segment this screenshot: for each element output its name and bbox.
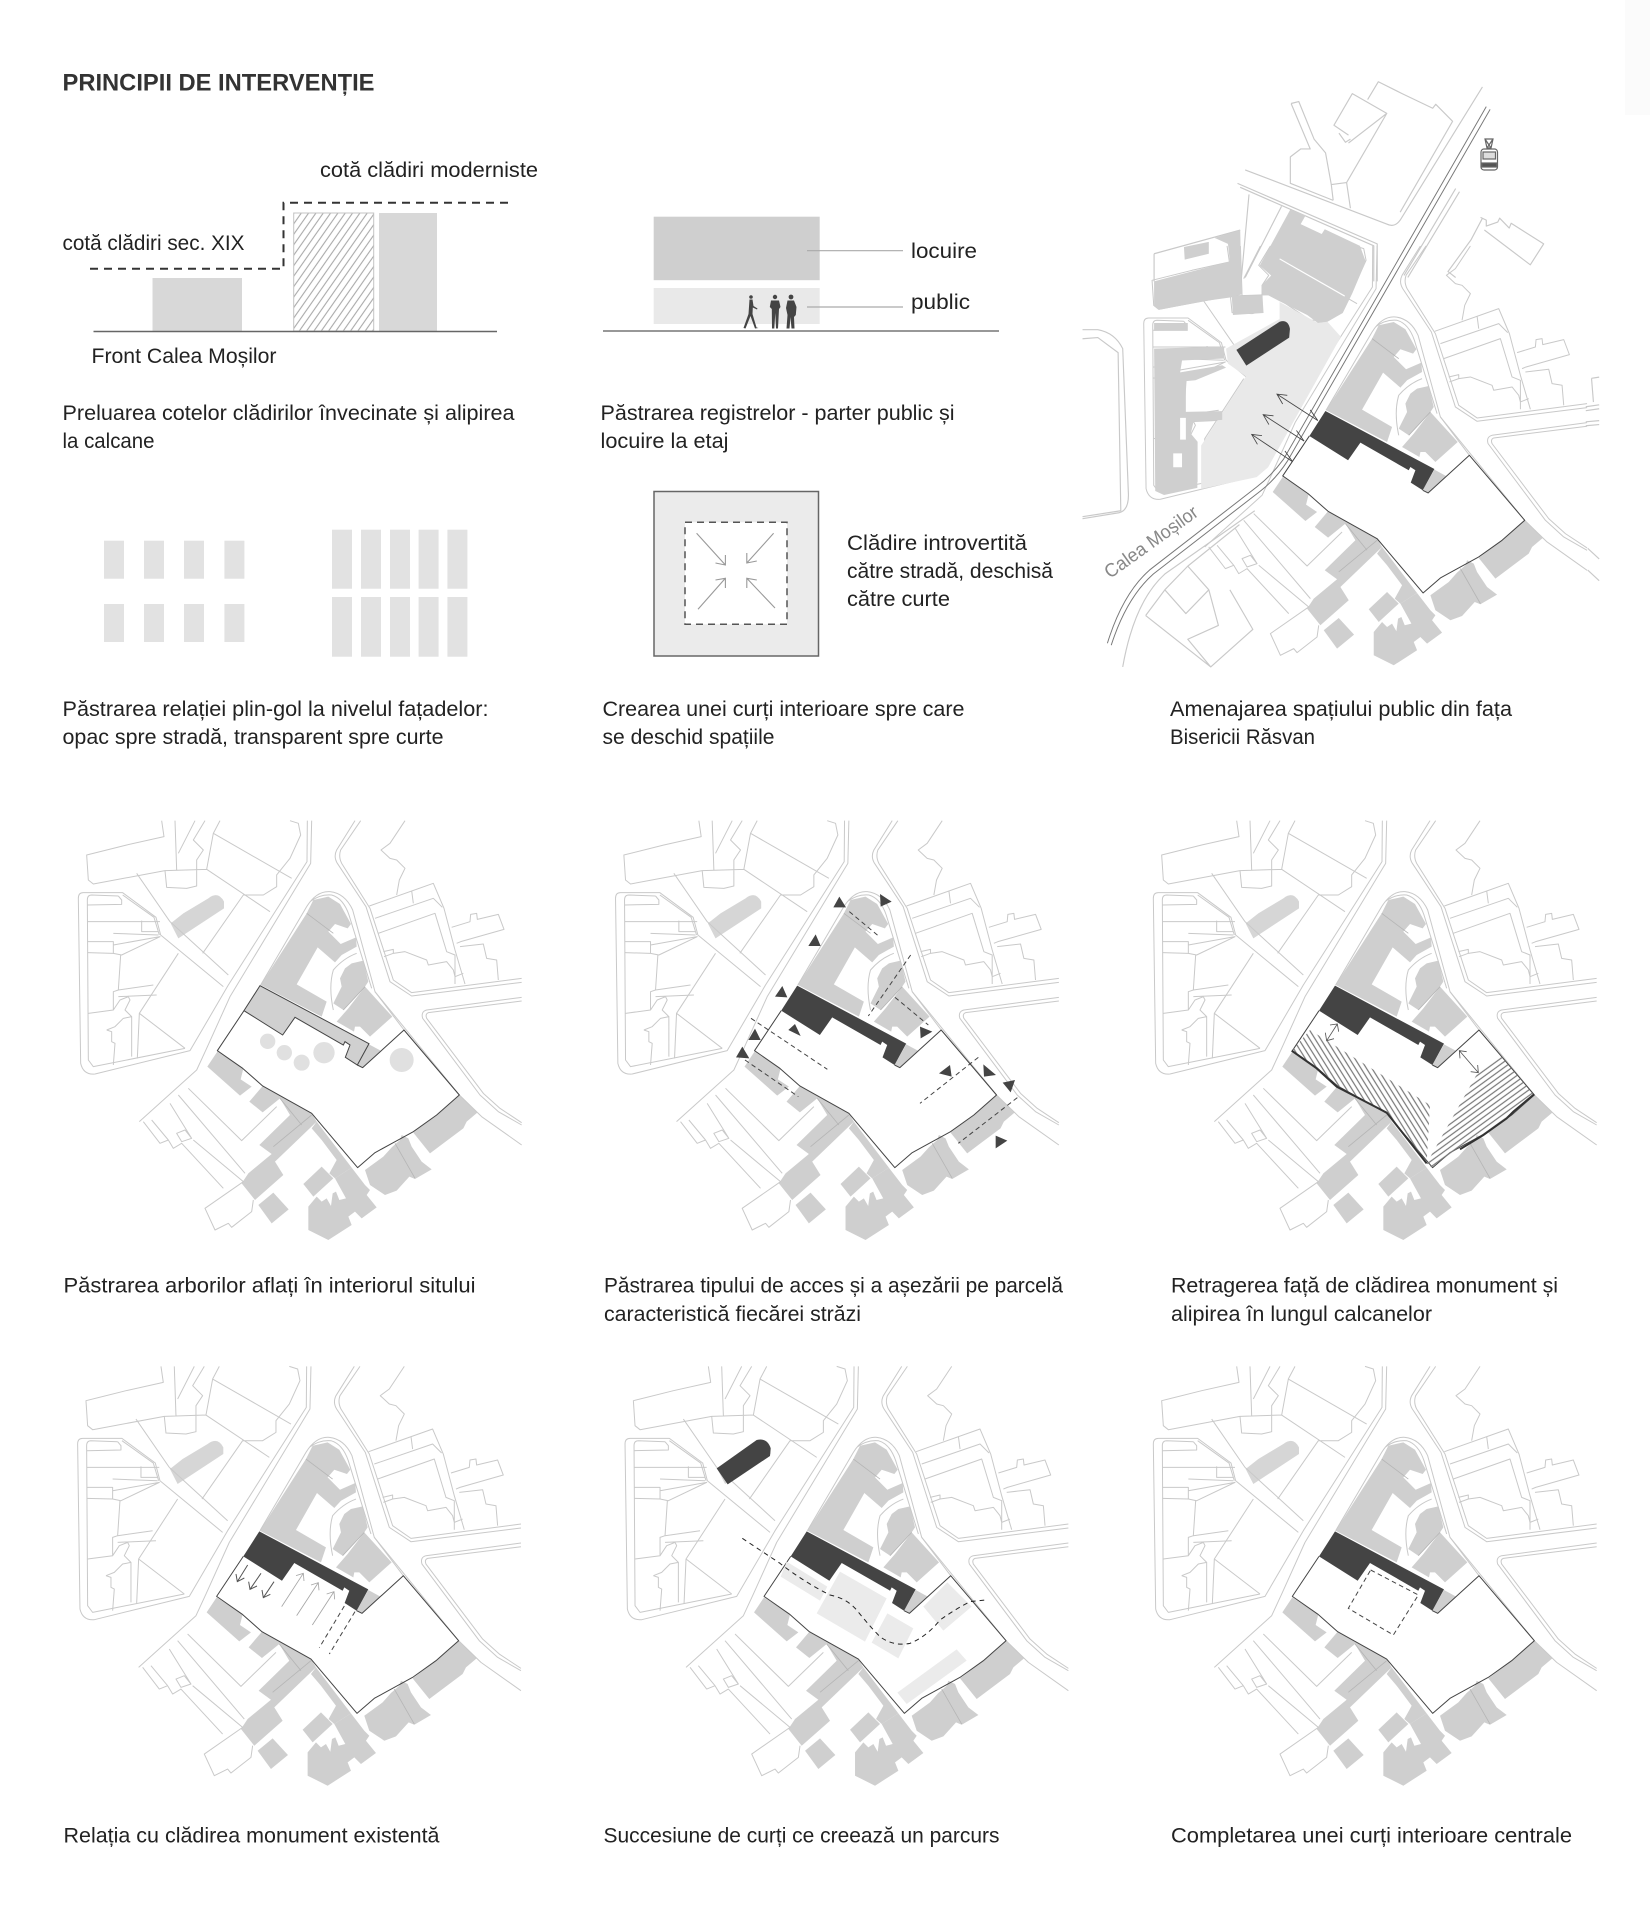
caption: courtyard: se deschid spațiile — [602, 726, 774, 749]
note: introverted building: către curte — [847, 588, 950, 611]
caption: public space — [1170, 698, 1512, 749]
caption: courtyard — [602, 698, 964, 749]
walking route — [742, 1538, 985, 1644]
caption: registers: locuire la etaj — [600, 430, 728, 453]
street lines and parcels north — [1083, 82, 1599, 581]
hatched setback bands — [1292, 1030, 1430, 1163]
caption: monument relation: Relația cu clădirea monument existentă — [64, 1824, 440, 1848]
street name: Calea Moșilor — [1101, 502, 1203, 583]
caption: solid-void: Păstrarea relației plin-gol la nivelul fațadelor: — [62, 698, 489, 721]
label: housing: locuire — [911, 240, 977, 263]
caption: courtyards: Succesiune de curți ce creează un parcurs — [604, 1824, 1000, 1848]
label: 19th century height: cotă clădiri sec. XIX — [62, 232, 244, 255]
map: public space in front of Răsvan church — [1083, 82, 1599, 667]
street lines and parcels southwest — [1123, 511, 1255, 667]
caption: setback: Retragerea față de clădirea monument și — [1171, 1274, 1558, 1298]
diagram: solid-void facades — [104, 530, 467, 657]
map: central interior courtyard — [1153, 1366, 1597, 1786]
plaza — [1201, 302, 1341, 489]
icon: tram — [1481, 139, 1498, 170]
caption: solid-void: opac spre stradă, transparent spre curte — [62, 726, 444, 749]
caption: access type: Păstrarea tipului de acces și a așezării pe parcelă — [604, 1274, 1063, 1298]
buildings northwest — [1260, 209, 1366, 323]
faint corner patch — [1625, 0, 1650, 115]
diagram: registers section — [603, 217, 999, 331]
caption: public space: Amenajarea spațiului public din fața — [1170, 698, 1512, 721]
title: PRINCIPII DE INTERVENȚIE — [62, 70, 374, 96]
note: introverted building: Clădire introvertită — [847, 532, 1027, 555]
diagram: building heights section — [62, 159, 538, 368]
map: succession of courtyards — [625, 1366, 1068, 1786]
arrows: inward to centre — [697, 533, 775, 609]
note: introverted building: către stradă, deschisă — [847, 560, 1053, 583]
caption: trees: Păstrarea arborilor aflați în interiorul sitului — [64, 1274, 476, 1298]
caption: registers: Păstrarea registrelor - parter public și — [600, 402, 954, 425]
icon: people — [744, 295, 796, 328]
dashed courtyard — [1348, 1570, 1418, 1635]
church — [1236, 321, 1290, 366]
dashed axes — [745, 912, 1017, 1143]
tram tracks — [1107, 107, 1490, 645]
label: modernist height: cotă clădiri moderniste — [320, 159, 538, 182]
map: preserved trees — [78, 821, 522, 1240]
label: public: public — [911, 291, 970, 314]
label: street front: Front Calea Moșilor — [92, 345, 276, 368]
caption: access type — [604, 1274, 1063, 1326]
caption: heights — [62, 402, 515, 453]
arrows: access across the street — [1252, 394, 1318, 462]
dark arrows: towards the wall — [236, 1565, 274, 1598]
caption: setback — [1171, 1274, 1558, 1326]
existing monument outlined — [244, 986, 369, 1065]
courtyards — [781, 1562, 972, 1704]
caption: heights: la calcane — [62, 430, 154, 453]
diagram: introverted courtyard — [654, 492, 818, 656]
caption: heights: Preluarea cotelor clădirilor învecinate și alipirea — [62, 402, 515, 425]
setback arrows — [1325, 1024, 1478, 1073]
caption: registers — [600, 402, 954, 453]
access triangles — [736, 894, 1015, 1148]
map: access type and plot placement — [616, 821, 1059, 1240]
party-wall lines — [1292, 1051, 1534, 1163]
caption: setback: alipirea în lungul calcanelor — [1171, 1303, 1432, 1326]
note: introverted building — [847, 532, 1053, 611]
buildings in west block — [1154, 323, 1226, 495]
map: setback from monument — [1153, 821, 1597, 1240]
trees — [260, 1034, 414, 1072]
church dark — [717, 1439, 771, 1484]
light arrows: towards the monument — [282, 1573, 335, 1625]
caption: courtyard: Crearea unei curți interioare spre care — [602, 698, 964, 721]
caption: public space: Bisericii Răsvan — [1170, 726, 1315, 749]
caption: central courtyard: Completarea unei curți interioare centrale — [1171, 1824, 1572, 1848]
caption: solid-void — [62, 698, 489, 749]
dashed passage — [319, 1606, 355, 1654]
caption: access type: caracteristică fiecărei străzi — [604, 1303, 861, 1326]
map: relation to existing monument — [78, 1366, 521, 1786]
site boundary — [217, 1011, 459, 1168]
